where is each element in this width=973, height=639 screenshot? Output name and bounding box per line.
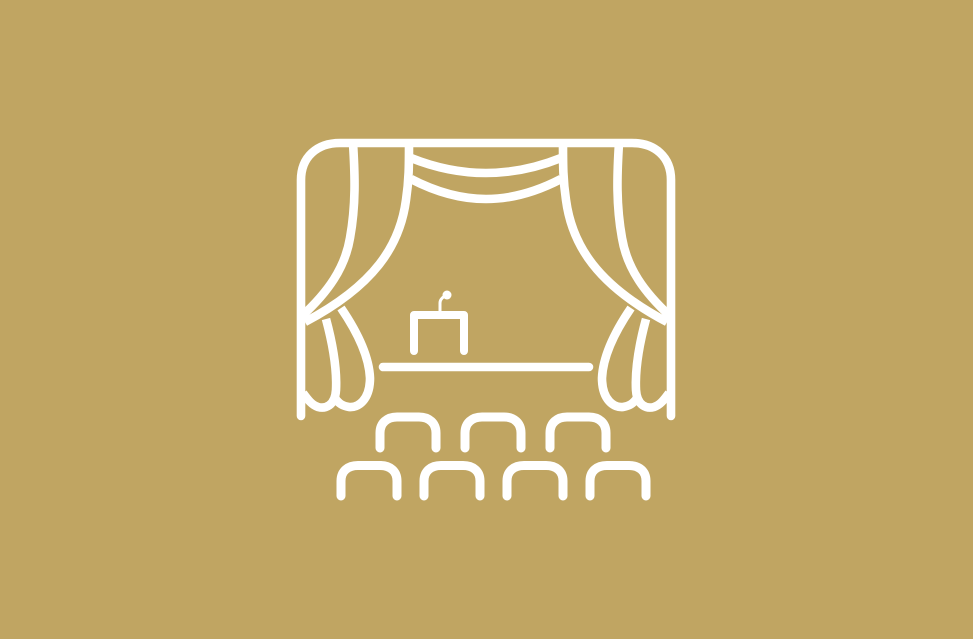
right curtain (563, 143, 670, 408)
left curtain (302, 143, 409, 408)
stage frame (301, 143, 671, 416)
icon: theatre (301, 143, 671, 496)
stage floor (383, 363, 589, 371)
podium (414, 290, 464, 351)
valance swags (411, 158, 561, 199)
audience seats, back row (380, 417, 606, 448)
audience seats, front row (341, 466, 646, 496)
microphone (440, 290, 452, 314)
